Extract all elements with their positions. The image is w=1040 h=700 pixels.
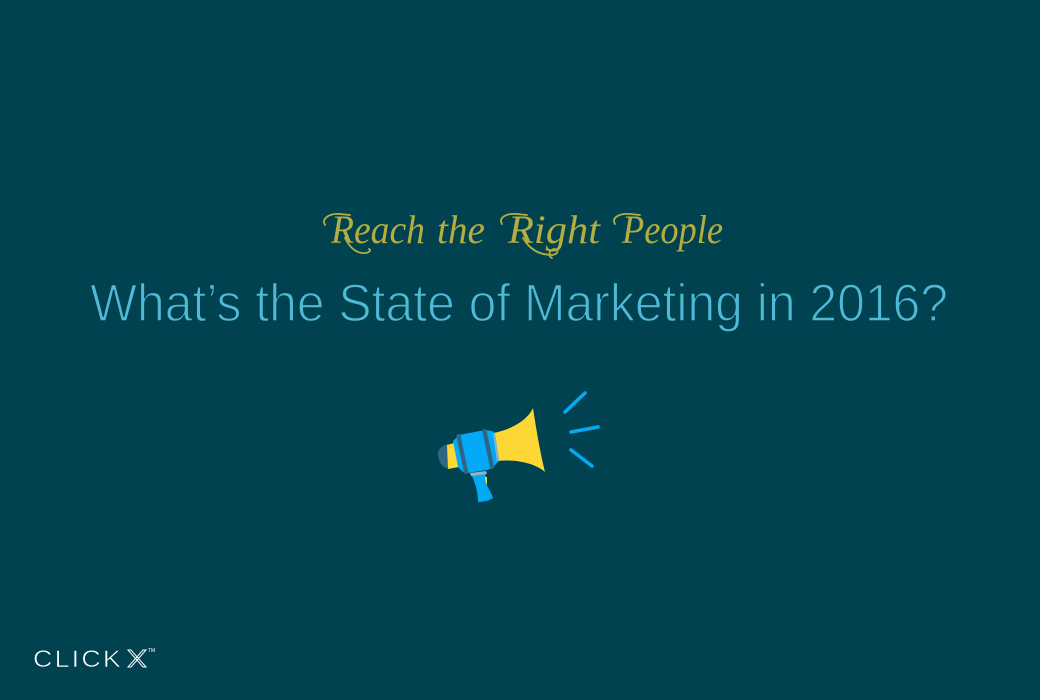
sound line top [565, 393, 585, 412]
heading: Reach the Right People: Reach [330, 207, 425, 252]
logo X mark [128, 650, 146, 667]
yellow rear section [447, 443, 459, 469]
icon: megaphone [438, 393, 598, 502]
yellow trigger [485, 477, 487, 484]
sound line bottom [571, 450, 592, 466]
trademark: TM [148, 648, 155, 654]
handle [471, 472, 493, 502]
heading: Reach the Right People: Right [507, 207, 601, 252]
heading: Reach the Right People: the [437, 207, 485, 252]
horn collar light [493, 433, 499, 462]
grey collar [470, 471, 487, 476]
sound line middle [571, 427, 598, 432]
heading: Reach the Right People: People [621, 207, 723, 252]
logo wordmark: CLICK [33, 646, 123, 673]
heading: Reach the Right People [324, 207, 723, 258]
dark rear band [458, 436, 466, 472]
blue body [453, 430, 499, 473]
logo: ClickX [33, 646, 155, 673]
dark front band [484, 431, 492, 467]
yellow horn [493, 408, 545, 472]
mic back cap [438, 444, 449, 469]
title: What's the State of Marketing in 2016?: What’s the State of Marketing in 2016? [90, 274, 948, 333]
